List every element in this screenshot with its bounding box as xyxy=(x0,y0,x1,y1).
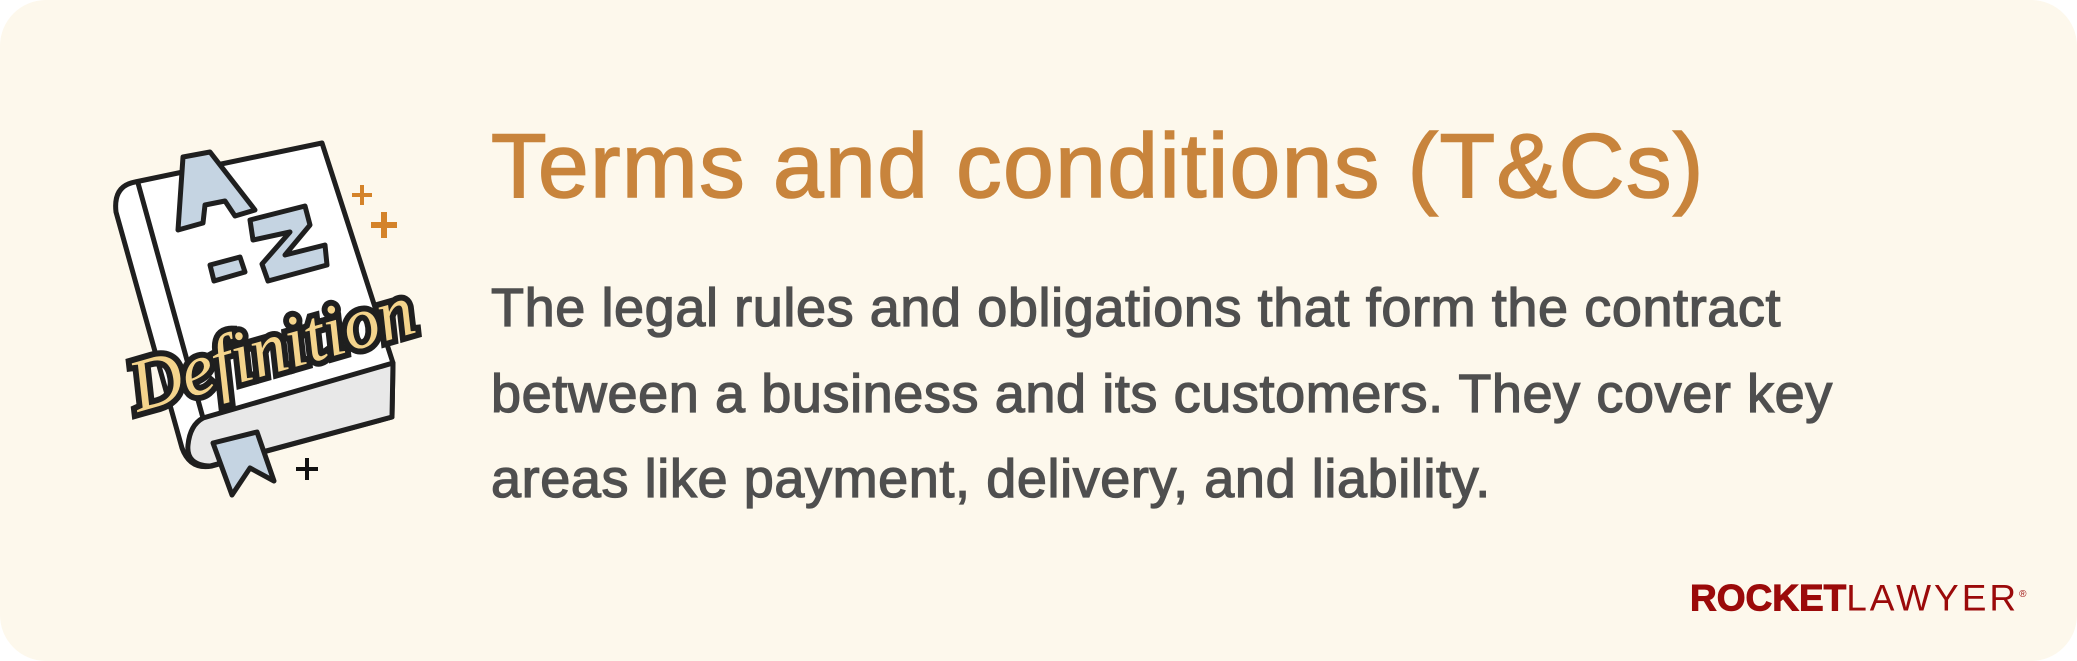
text block: definition: areas like payment, delivery, and liability. xyxy=(491,449,1491,509)
icon: A-Z definition book: Definition xyxy=(119,269,423,429)
icon: A-Z definition book xyxy=(113,140,423,498)
text block: definition xyxy=(491,278,1833,509)
text block: definition: between a business and its customers. They cover key xyxy=(491,364,1833,424)
logo: Rocket Lawyer: ROCKETLAWYER® xyxy=(1690,577,2026,618)
text block: definition: The legal rules and obligations that form the contract xyxy=(491,278,1781,338)
title: Terms and conditions (T&Cs) xyxy=(491,116,1705,217)
